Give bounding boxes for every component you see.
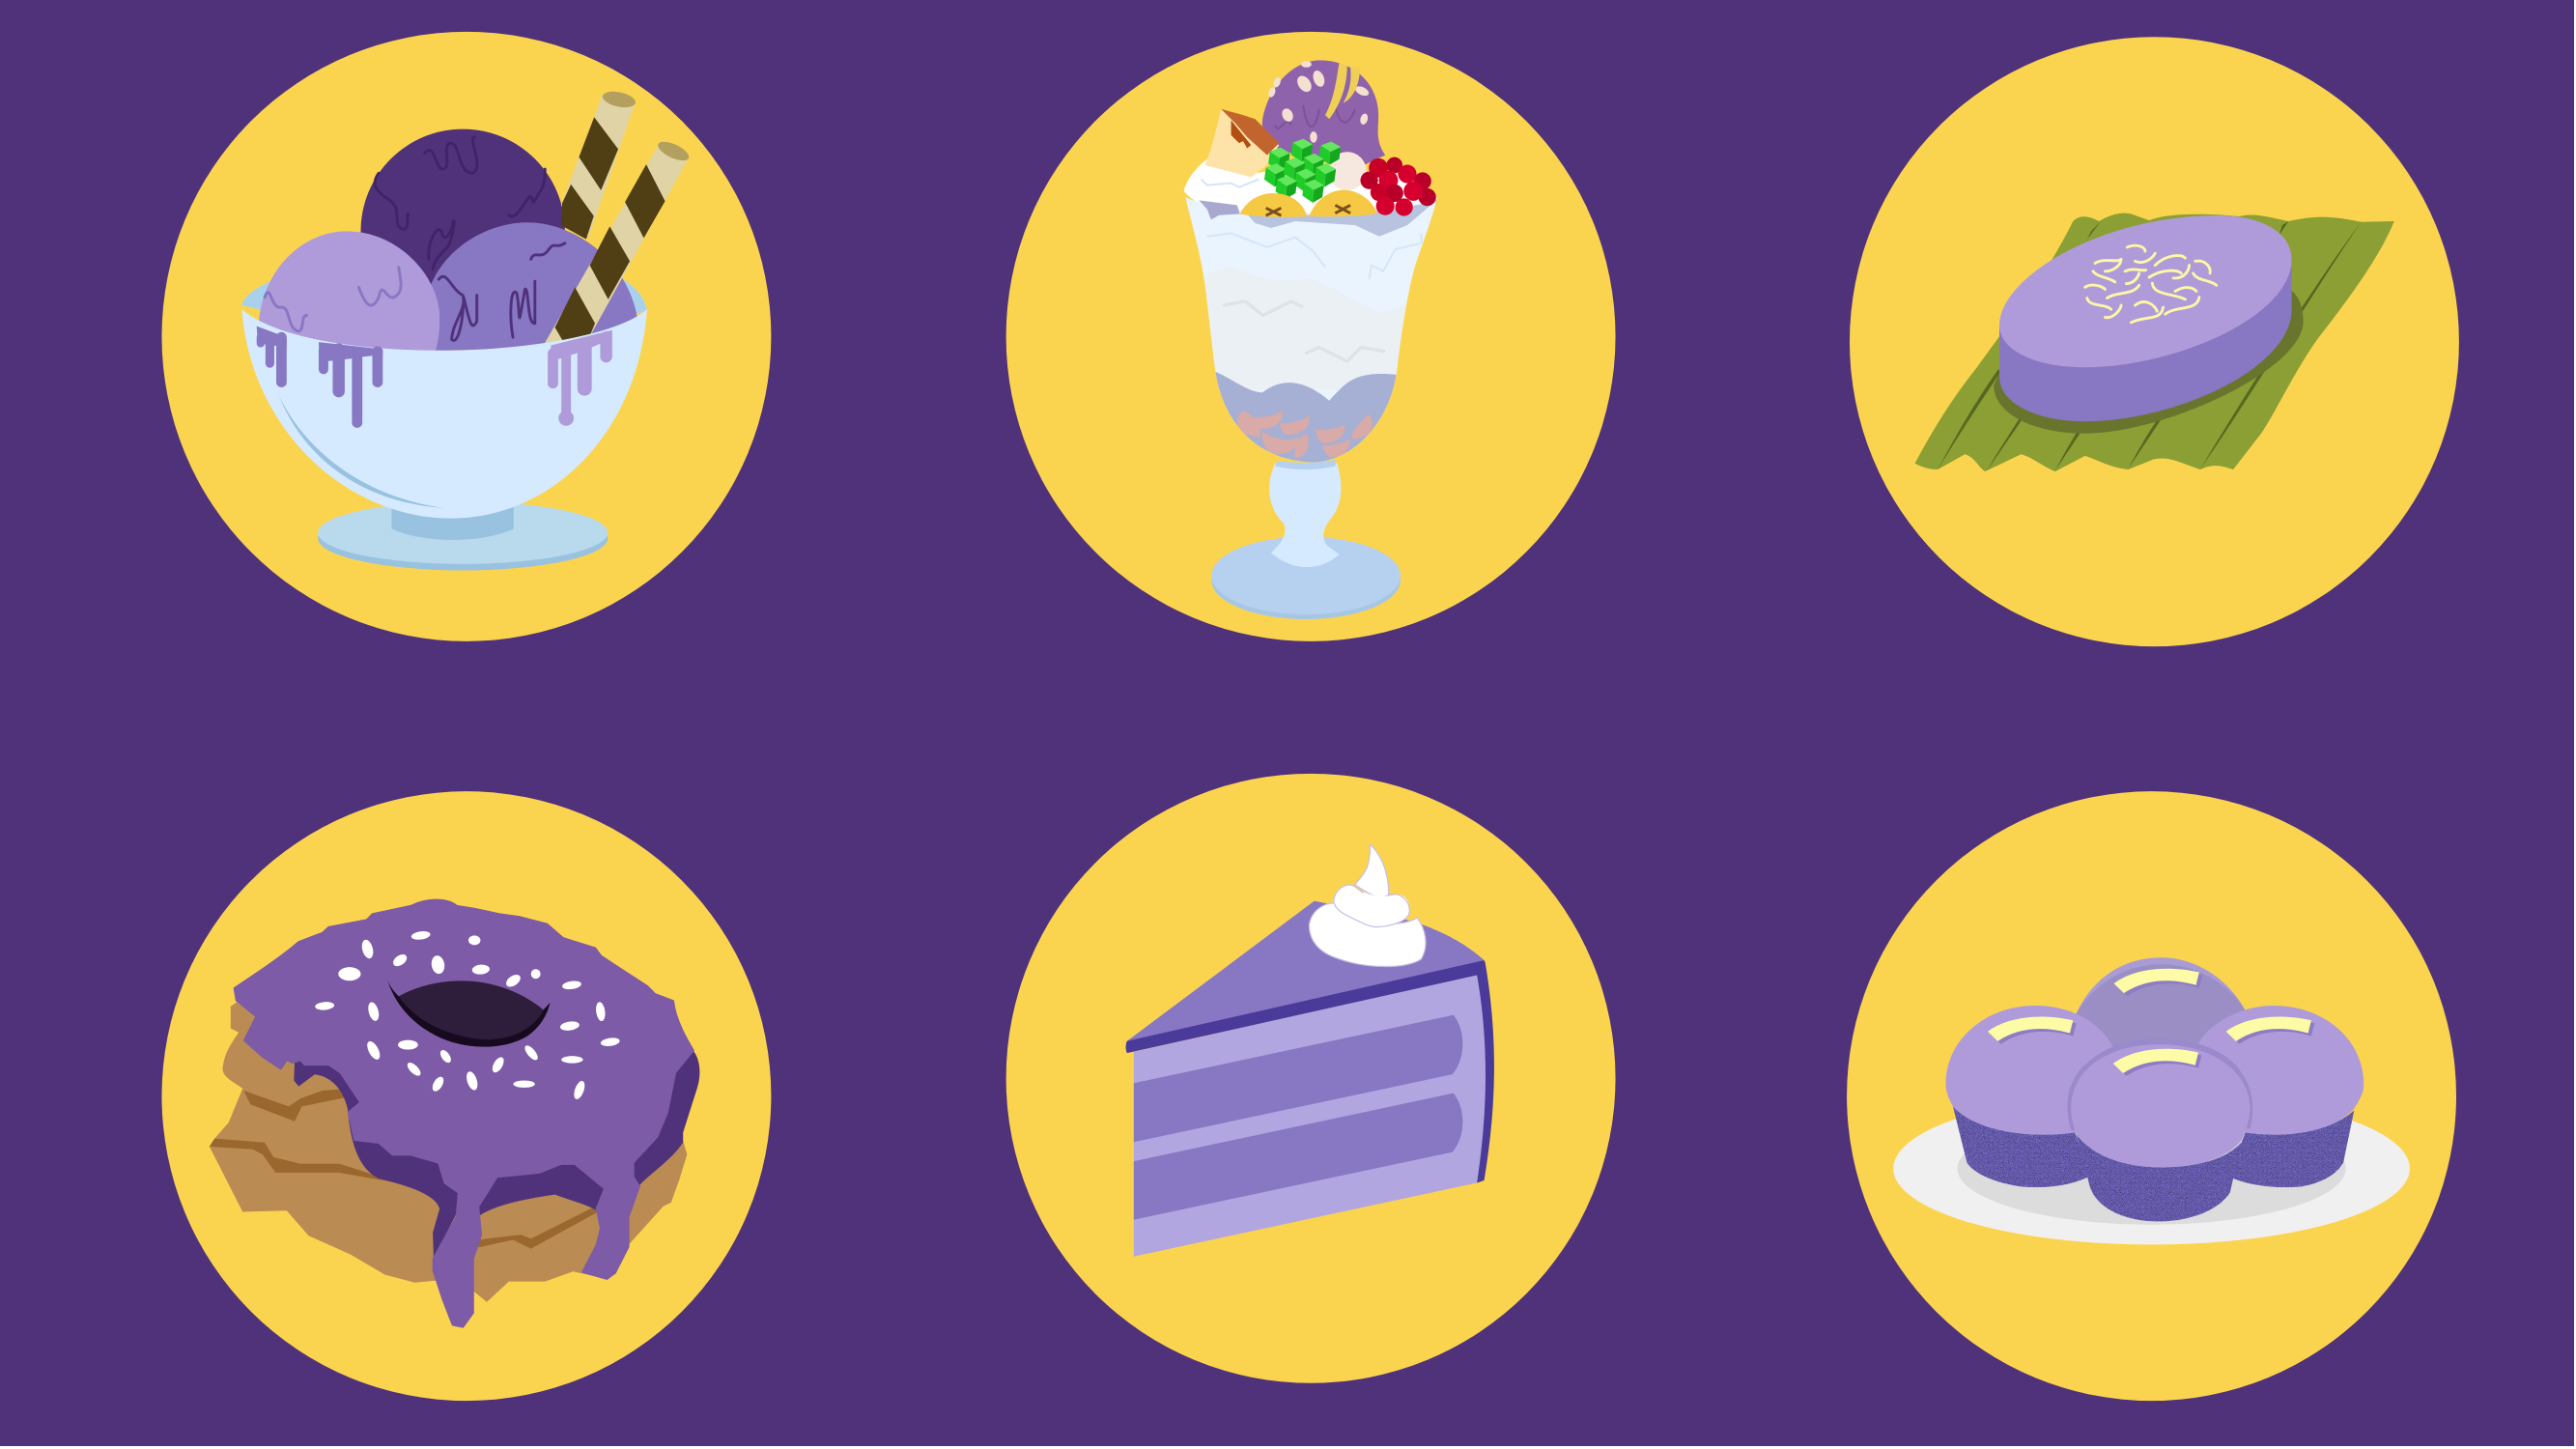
dark scoop: [360, 129, 565, 285]
red beans: [1237, 411, 1373, 459]
bowl back rim: [241, 279, 647, 354]
sprinkles: [315, 930, 620, 1100]
panel: ice cream bowl: [161, 32, 771, 641]
nata de coco: [1328, 152, 1367, 190]
shaved ice middle layer: [1195, 266, 1419, 389]
yellow circle: [161, 32, 771, 641]
dough: [210, 1003, 687, 1302]
cake front face: [1134, 975, 1486, 1257]
ube bottom layer: [1215, 372, 1397, 462]
panel: ube cake slice: [1006, 774, 1616, 1383]
plate: [1893, 1093, 2410, 1244]
light scoop: [259, 231, 439, 351]
left drips: [257, 327, 382, 422]
stem collar: [1275, 460, 1336, 469]
upper ice layer: [1183, 189, 1439, 469]
glass stem: [1269, 464, 1341, 567]
icing shadow: [294, 1050, 699, 1259]
front bun: [2067, 1038, 2252, 1221]
panel: puto cupcakes on plate: [1847, 791, 2456, 1401]
left bun: [1945, 1006, 2121, 1187]
lavender rim shadows: [1199, 200, 1436, 237]
glass foot: [318, 501, 608, 570]
glass foot: [1211, 537, 1401, 619]
right bun: [2197, 1006, 2364, 1187]
ube scoop: [1262, 60, 1385, 169]
yellow circle: [161, 791, 771, 1401]
leche flan: [1205, 109, 1279, 177]
yellow circle: [1006, 32, 1616, 641]
dough cracks: [210, 1090, 598, 1249]
leaf creases: [1938, 221, 2362, 470]
coconut shreds: [2085, 245, 2217, 323]
panel: rice cake on banana leaf: [1850, 37, 2459, 646]
icing: [235, 900, 694, 1326]
cake top: [1127, 901, 1485, 1045]
green jelly cubes: [1264, 139, 1341, 203]
banana leaf: [1915, 213, 2394, 471]
donut hole: [387, 980, 551, 1047]
cake side: [1999, 259, 2292, 421]
right drips: [551, 330, 612, 426]
whipped cream: [1309, 844, 1426, 967]
white whipped top: [1184, 159, 1437, 216]
back bun: [2076, 957, 2246, 1048]
panel: halo-halo parfait: [1006, 32, 1616, 641]
scoop swirls: [265, 137, 565, 340]
panel: ube donut: [161, 791, 771, 1401]
glass contents: [1183, 189, 1439, 469]
bowl body: [241, 309, 647, 519]
filling layers: [1134, 1015, 1462, 1220]
red berries: [1360, 157, 1436, 216]
cake top: [1999, 215, 2292, 367]
cake shadow: [1994, 289, 2304, 434]
yellow circle: [1850, 37, 2459, 646]
bowl highlight: [279, 395, 443, 508]
ice crack lines: [1201, 179, 1421, 361]
dark edge bands: [1126, 960, 1494, 1182]
yellow circle: [1847, 791, 2456, 1401]
medium scoop: [431, 222, 638, 351]
front wafer stick: [544, 138, 692, 344]
yellow circle: [1006, 774, 1616, 1383]
banana slices: [1240, 190, 1377, 217]
back wafer stick: [561, 89, 637, 240]
